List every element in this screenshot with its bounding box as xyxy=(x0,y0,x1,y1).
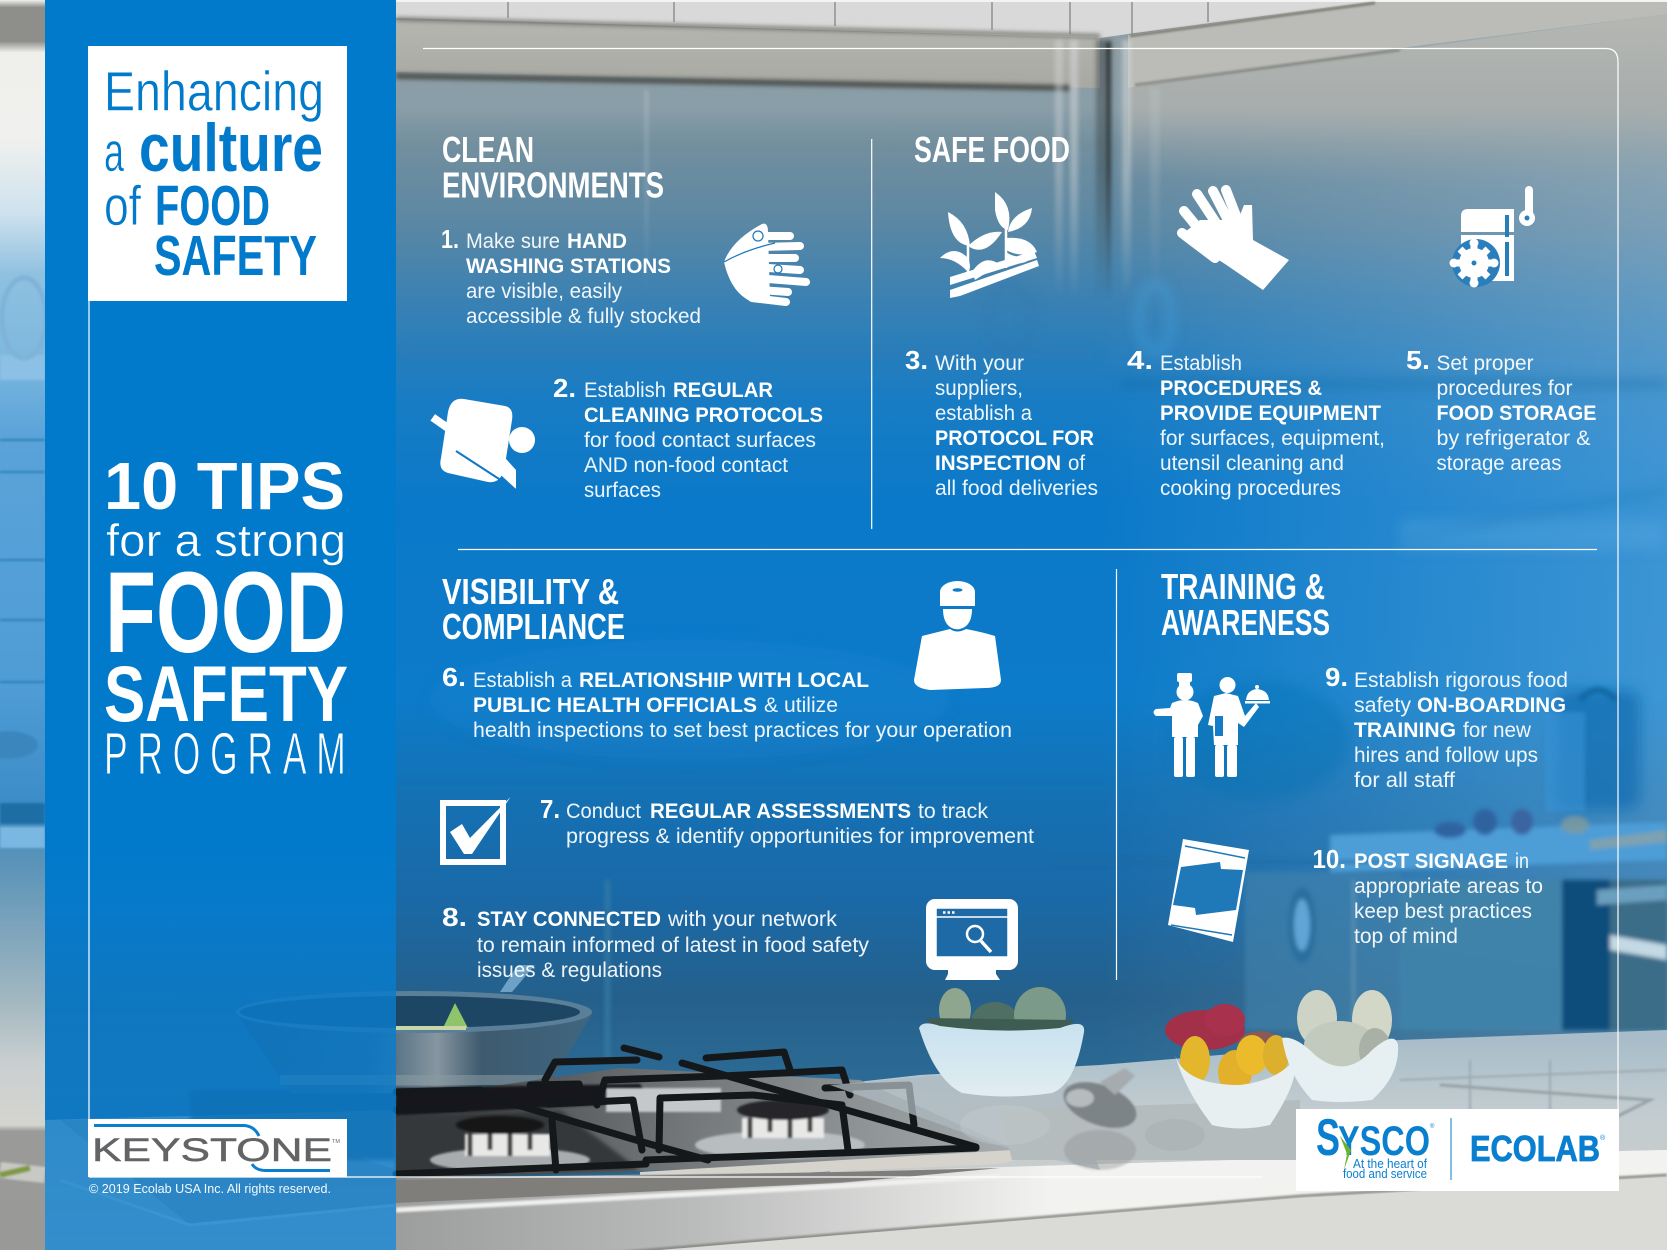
tip 4 xyxy=(1127,345,1385,500)
icon: posted sign xyxy=(1168,839,1249,942)
heading: clean environments: CLEAN xyxy=(442,129,534,170)
icon: glove xyxy=(1180,190,1289,290)
logo: Keystone xyxy=(88,1119,347,1177)
tip 8: STAY CONNECTED xyxy=(477,908,661,931)
tip 7: progress & identify opportunities for improvement xyxy=(566,825,1034,848)
tip 4: PROCEDURES & xyxy=(1160,377,1322,400)
section: clean environments xyxy=(430,129,823,502)
tip 7 xyxy=(540,794,1034,848)
sidebar headline: 10 tips xyxy=(104,449,348,787)
icon: plants xyxy=(940,192,1039,298)
left sidebar xyxy=(45,0,396,1250)
tip 6: RELATIONSHIP WITH LOCAL xyxy=(579,669,869,692)
tip 8: 8. xyxy=(442,902,467,932)
section: safe food xyxy=(905,129,1596,500)
section: training and awareness xyxy=(1154,566,1568,948)
tip 3: of xyxy=(1068,452,1085,475)
tip 5: storage areas xyxy=(1436,452,1562,475)
counter front edge xyxy=(396,1065,1667,1250)
tip 3: all food deliveries xyxy=(935,477,1098,500)
copyright: © 2019 Ecolab USA Inc. All rights reserved. xyxy=(89,1182,331,1196)
tip 1: HAND xyxy=(567,230,627,253)
tip 5: procedures for xyxy=(1436,377,1573,400)
heading: safe food: SAFE FOOD xyxy=(914,129,1070,170)
tip 6: 6. xyxy=(442,662,466,692)
tip 4: 4. xyxy=(1127,345,1153,375)
tip 3: PROTOCOL FOR xyxy=(935,427,1094,450)
tip 4: Establish xyxy=(1160,352,1242,375)
tip 2 xyxy=(553,373,823,502)
heading: training and awareness xyxy=(1161,566,1330,643)
sidebar headline: 10 tips: PROGRAM xyxy=(104,722,346,787)
tip 1 xyxy=(441,224,701,328)
tip 2: 2. xyxy=(553,373,576,403)
tip 3: INSPECTION xyxy=(935,452,1061,475)
tip 9: for all staff xyxy=(1354,769,1455,792)
tip 6: & utilize xyxy=(764,694,838,717)
tip 2: Establish xyxy=(584,379,666,402)
tip 1: are visible, easily xyxy=(466,280,622,303)
mushroom bowl xyxy=(1282,990,1398,1102)
tip 3: suppliers, xyxy=(935,377,1023,400)
heading: training and awareness: AWARENESS xyxy=(1161,602,1330,643)
section: visibility and compliance xyxy=(442,571,1034,982)
tip 7: Conduct xyxy=(566,800,641,823)
sidebar headline: 10 tips: for a strong xyxy=(106,515,346,566)
tip 2: surfaces xyxy=(584,479,661,502)
tip 1: 1. xyxy=(441,224,459,254)
tip 9: hires and follow ups xyxy=(1354,744,1538,767)
tip 7: to track xyxy=(918,800,989,823)
cabinet centre column xyxy=(645,40,1160,312)
garlic press xyxy=(1057,1068,1143,1170)
tip 4: utensil cleaning and xyxy=(1160,452,1344,475)
logos: Sysco and Ecolab: ® xyxy=(1600,1134,1606,1142)
tip 5: 5. xyxy=(1406,345,1430,375)
title card: Enhancing xyxy=(104,60,324,123)
tip 7: REGULAR ASSESSMENTS xyxy=(650,800,911,823)
tip 1: WASHING STATIONS xyxy=(466,255,671,278)
tip 9: Establish rigorous food xyxy=(1354,669,1568,692)
tip 6: Establish a xyxy=(473,669,572,692)
title card: a xyxy=(104,120,125,183)
logos: Sysco and Ecolab: ® xyxy=(1430,1123,1435,1130)
tip 4: for surfaces, equipment, xyxy=(1160,427,1385,450)
tip 6: PUBLIC HEALTH OFFICIALS xyxy=(473,694,757,717)
tip 3: With your xyxy=(935,352,1024,375)
white bowl with greens xyxy=(919,987,1084,1145)
tip 1: Make sure xyxy=(466,230,560,253)
tip 5: by refrigerator & xyxy=(1436,427,1590,450)
title card: SAFETY xyxy=(154,224,317,288)
heading: visibility and compliance xyxy=(442,571,625,647)
faint blurred photo forms under the wash xyxy=(396,284,1667,810)
heading: clean environments: ENVIRONMENTS xyxy=(442,164,664,206)
tip 9 xyxy=(1325,662,1568,792)
tip 5: FOOD STORAGE xyxy=(1436,402,1596,425)
logos: Sysco and Ecolab: ECOLAB xyxy=(1470,1128,1600,1169)
sidebar headline: 10 tips: FOOD xyxy=(105,549,346,677)
heading: training and awareness: TRAINING & xyxy=(1161,566,1325,607)
title card: of xyxy=(104,174,141,237)
tip 2: CLEANING PROTOCOLS xyxy=(584,404,823,427)
tip 10 xyxy=(1312,844,1543,948)
tip 4: PROVIDE EQUIPMENT xyxy=(1160,402,1381,425)
logos: Sysco and Ecolab: S xyxy=(1316,1109,1340,1167)
logos: Sysco and Ecolab: food and service xyxy=(1343,1166,1427,1181)
counter surface and right marble xyxy=(830,1030,1667,1180)
tip 4: cooking procedures xyxy=(1160,477,1341,500)
tip 9: TRAINING xyxy=(1354,719,1456,742)
logo: Keystone: TM xyxy=(332,1139,340,1145)
sidebar headline: 10 tips: 10 TIPS xyxy=(104,449,345,524)
tip 2: REGULAR xyxy=(673,379,773,402)
logos: Sysco and Ecolab: YSCO xyxy=(1338,1117,1430,1164)
tip 10: in xyxy=(1515,850,1529,873)
icon: fridge, thermometer, snowflake xyxy=(1450,186,1535,288)
tip 9: safety xyxy=(1354,694,1412,717)
wok xyxy=(236,965,592,1094)
tip 3: establish a xyxy=(935,402,1032,425)
tip 2: AND non-food contact xyxy=(584,454,788,477)
tip 8 xyxy=(442,902,870,982)
title card xyxy=(88,46,347,301)
title card: FOOD xyxy=(155,174,270,238)
tip 9: 9. xyxy=(1325,662,1348,692)
logo: Keystone: KEYSTONE xyxy=(92,1132,332,1168)
tip 8: to remain informed of latest in food safety xyxy=(477,934,870,957)
icon: health inspector xyxy=(914,581,1001,690)
logos: Sysco and Ecolab: At the heart of xyxy=(1353,1156,1427,1171)
tip 2: for food contact surfaces xyxy=(584,429,816,452)
logos: Sysco and Ecolab xyxy=(1296,1109,1619,1191)
tip 7: 7. xyxy=(540,794,560,824)
heading: clean environments xyxy=(442,129,664,206)
icon: chef and waiter xyxy=(1154,673,1270,777)
gas stove xyxy=(396,1048,1016,1180)
tip 3 xyxy=(905,345,1098,500)
tip 10: 10. xyxy=(1312,844,1346,874)
tip 10: top of mind xyxy=(1354,925,1458,948)
heading: visibility and compliance: COMPLIANCE xyxy=(442,606,625,647)
tip 5: Set proper xyxy=(1436,352,1534,375)
scene under the translucent sidebar xyxy=(45,1090,396,1250)
outer frame rule xyxy=(423,48,1618,1110)
icon: monitor with magnifier xyxy=(926,899,1018,980)
tile row and stainless hood xyxy=(396,2,1370,38)
fruit bowl xyxy=(1145,1004,1296,1151)
icon: checkbox xyxy=(443,797,510,862)
tip 9: for new xyxy=(1463,719,1532,742)
tip 1: accessible & fully stocked xyxy=(466,305,701,328)
tip 6 xyxy=(442,662,1012,742)
tip 8: issues & regulations xyxy=(477,959,662,982)
tip 5 xyxy=(1406,345,1596,475)
tip 9: ON-BOARDING xyxy=(1417,694,1566,717)
sidebar headline: 10 tips: SAFETY xyxy=(104,649,348,738)
title card: culture xyxy=(139,110,323,186)
tip 10: appropriate areas to xyxy=(1354,875,1543,898)
tip 10: POST SIGNAGE xyxy=(1354,850,1508,873)
tip 6: health inspections to set best practices for your operation xyxy=(473,719,1012,742)
tip 8: with your network xyxy=(667,908,838,931)
tip 10: keep best practices xyxy=(1354,900,1532,923)
icon: washing hands xyxy=(724,224,806,303)
heading: visibility and compliance: VISIBILITY & xyxy=(442,571,619,612)
icon: knife and cutting board xyxy=(430,399,535,490)
tip 3: 3. xyxy=(905,345,928,375)
